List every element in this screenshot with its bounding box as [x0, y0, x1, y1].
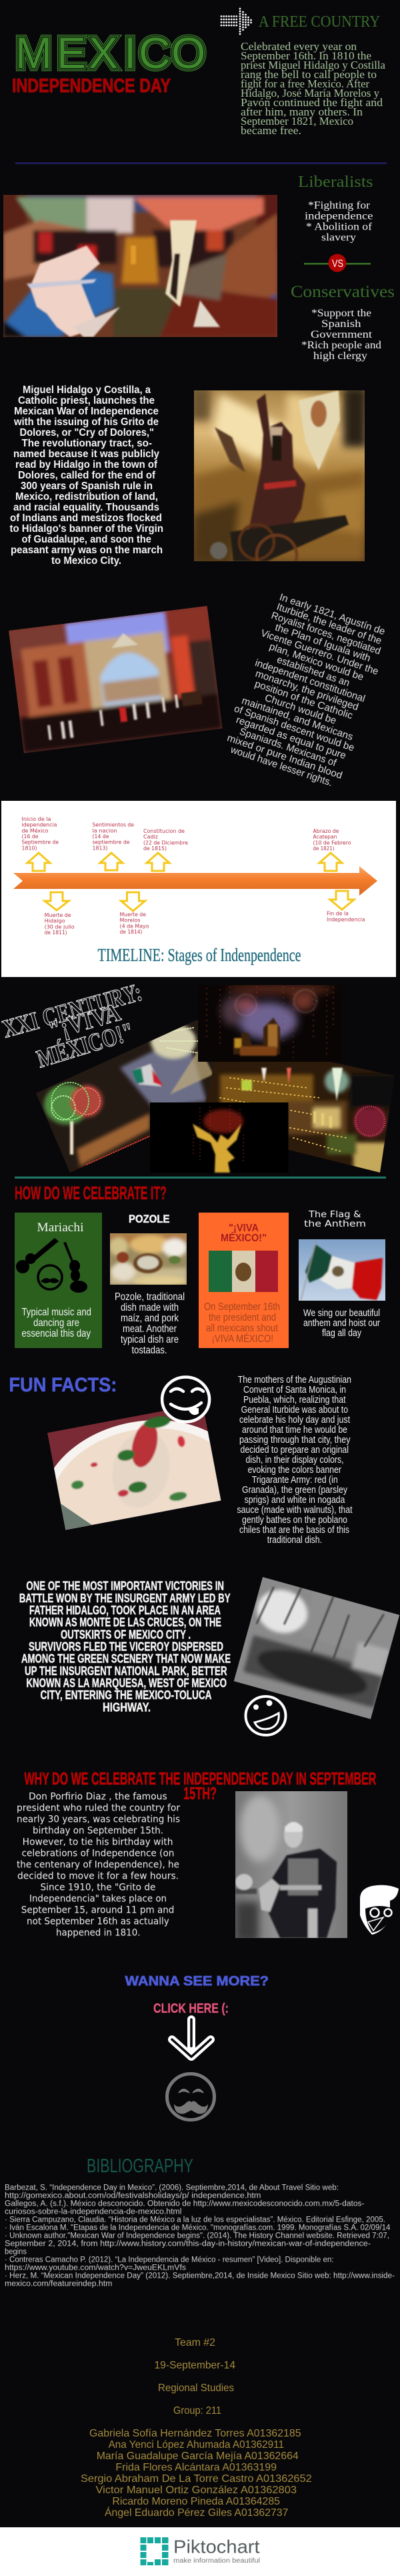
- panel: Mariachi: [15, 1213, 102, 1348]
- text block: team credits: Group: 211: [173, 2405, 221, 2417]
- text block: chiles en nogada story: dish, in their display colors,: [245, 1454, 344, 1466]
- text block: introduction: fight for a free Mexico. After: [241, 77, 370, 90]
- icon: laughing smiley: [245, 1696, 285, 1735]
- text block: team credits: Ricardo Moreno Pineda A01364285: [112, 2496, 280, 2507]
- timeline labels above: Cadiz: [143, 834, 158, 840]
- image: fireworks aerial city (right): [205, 1062, 395, 1173]
- text block: introduction: priest Miguel Hidalgo y Costilla: [241, 59, 386, 71]
- text block: Miguel Hidalgo: with the issuing of his Grito de: [13, 416, 159, 428]
- text block: Miguel Hidalgo: peasant army was on the march: [11, 545, 163, 556]
- text block: team credits: María Guadalupe García Mejía A01362664: [97, 2451, 299, 2462]
- text block: Monte de las Cruces: FATHER HIDALGO, TOOK PLACE IN AN AREA: [29, 1603, 221, 1617]
- heading: XXI Century Viva Mexico: "¡VIVA: [45, 998, 124, 1045]
- text block: Plan of Iguala (rotated): independent constitutional: [253, 657, 367, 705]
- text block: Plan of Iguala (rotated): mixed or pure Indian blood: [226, 732, 344, 781]
- liberalist points: * Abolition of: [306, 222, 373, 232]
- icon: man with glasses: [360, 1885, 399, 1935]
- Viva Mexico caption: the president and: [209, 1312, 276, 1323]
- Piktochart wordmark: Piktochart: [173, 2537, 260, 2557]
- text block: chiles en nogada story: Granada), the green (parsley: [242, 1484, 347, 1496]
- text block: introduction: Hidalgo, José María Morelos y: [241, 87, 380, 99]
- timeline labels above: (16 de: [21, 834, 39, 840]
- VS badge: VS: [332, 258, 343, 270]
- text block: Monte de las Cruces: KNOWN AS MONTE DE LAS CRUCES, ON THE: [29, 1615, 221, 1629]
- text block: chiles en nogada story: sauce (made with walnuts), that: [237, 1504, 353, 1516]
- flag title: [304, 1210, 366, 1229]
- timeline labels above: (22 de Diciembre: [143, 840, 188, 846]
- icon: tongue smiley: [162, 1377, 209, 1421]
- text block: Miguel Hidalgo: named because it was publicly: [13, 448, 159, 460]
- flag caption: flag all day: [322, 1327, 361, 1339]
- image: independence mural: [0, 190, 283, 337]
- text block: chiles en nogada story: Trigarante Army: red (in: [252, 1474, 338, 1486]
- text block: bibliography: begins: [5, 2248, 27, 2256]
- text block: Porfirio Diaz: September 15, around 11 pm and: [21, 1905, 174, 1916]
- text block: Porfirio Diaz: However, to tie his birthday with: [23, 1837, 173, 1848]
- image: fireworks over cathedral: [198, 982, 342, 1062]
- text block: Miguel Hidalgo: Miguel Hidalgo y Costilla, a: [23, 384, 151, 396]
- text block: bibliography: curiosos-sobre-la-independencia-de-mexico.html: [5, 2208, 181, 2216]
- text block: Monte de las Cruces: [19, 1579, 231, 1714]
- text block: chiles en nogada story: chiles that are the basis of this: [239, 1524, 349, 1536]
- text block: bibliography: mexico.com/featureindep.htm: [5, 2280, 112, 2288]
- text block: Plan of Iguala (rotated): would have lesser rights.: [229, 744, 334, 789]
- timeline title: TIMELINE: Stages of Indenpendence: [97, 945, 301, 965]
- Pozole caption: maíz, and pork: [121, 1313, 179, 1324]
- text block: Plan of Iguala (rotated): monarchy, the privileged: [254, 668, 360, 713]
- text block: Porfirio Diaz: [17, 1792, 181, 1939]
- panel: The Flag and the Anthem: [299, 1210, 385, 1339]
- text block: introduction: after him, many others. In: [241, 105, 363, 118]
- image: Porfirio Diaz portrait: [235, 1791, 347, 1942]
- title: Mexico Independence Day: MEXICO: [15, 28, 205, 77]
- heading: Liberalists: Liberalists: [298, 174, 373, 191]
- text block: introduction: [241, 40, 386, 137]
- text block: team credits: Regional Studies: [158, 2382, 234, 2394]
- timeline down arrows: [45, 891, 354, 911]
- heading: Bibliography: BIBLIOGRAPHY: [87, 2156, 193, 2177]
- timeline labels above: (10 de Febrero: [313, 840, 351, 846]
- text block: Plan of Iguala (rotated): plan, Mexico would be: [268, 641, 365, 683]
- image: triumphal arch parade painting: [9, 606, 223, 753]
- text block: team credits: Victor Manuel Ortiz González A01362803: [96, 2485, 297, 2496]
- text block: bibliography: · Iván Escalona M. "Etapas de la Independencia de México. "monografías.com. 1999. Monografías S.A. 02/09/14: [5, 2224, 391, 2232]
- text block: introduction: Pavón continued the fight and: [241, 96, 383, 109]
- text block: Porfirio Diaz: Independencia" takes place on: [29, 1894, 167, 1905]
- flag title: The Flag &: [308, 1210, 361, 1220]
- text block: Monte de las Cruces: AMONG THE GREEN SCENERY THAT NOW MAKE: [21, 1652, 231, 1666]
- image: battle engraving: [234, 1577, 399, 1719]
- conservative points: Government: [311, 329, 373, 340]
- timeline labels above: 1813): [92, 845, 108, 851]
- timeline labels below: (30 de julio: [45, 924, 75, 930]
- heading: How do we celebrate it: HOW DO WE CELEBRATE IT?: [15, 1183, 167, 1203]
- text block: Porfirio Diaz: celebrations of Independence (on: [21, 1849, 174, 1859]
- timeline up arrows: [27, 853, 342, 871]
- timeline labels above: 1810): [21, 845, 37, 851]
- text block: bibliography: · Contreras Camacho P. (2012). “La Independencia de México - resumen” [Video]. Disponible en:: [5, 2256, 333, 2264]
- text block: Plan of Iguala (rotated): position of the Catholic: [253, 678, 355, 721]
- text block: chiles en nogada story: passing through that city, they: [239, 1434, 351, 1445]
- text block: Miguel Hidalgo: Mexican War of Independence: [14, 406, 159, 417]
- timeline labels above: la nacion: [92, 828, 117, 834]
- heading: XXI Century Viva Mexico: MÉXICO!": [33, 1018, 137, 1074]
- text block: Monte de las Cruces: KNOWN AS LA MARQUESA, WEST OF MEXICO: [26, 1676, 227, 1690]
- timeline labels below: de 1811): [45, 930, 67, 936]
- text block: introduction: became free.: [241, 124, 301, 137]
- timeline labels below: Fin de la: [327, 911, 349, 917]
- text block: Monte de las Cruces: UP THE INSURGENT NATIONAL PARK, BETTER: [25, 1664, 227, 1678]
- text block: Monte de las Cruces: CITY, ENTERING THE MEXICO-TOLUCA: [40, 1688, 212, 1702]
- conservative points: *Rich people and: [301, 340, 381, 351]
- text block: Plan of Iguala (rotated): In early 1821, Agustín de: [278, 591, 387, 637]
- text block: Miguel Hidalgo: Catholic priest, launches the: [18, 395, 155, 406]
- text block: bibliography: http://gomexico.about.com/od/festivalsholidays/p/ independence.htm: [5, 2192, 261, 2200]
- text block: Porfirio Diaz: the centenary of Independence), he: [17, 1860, 179, 1871]
- Pozole caption: dish made with: [121, 1302, 179, 1313]
- timeline labels above: Sentimientos de: [92, 822, 134, 828]
- timeline labels above: [21, 816, 351, 852]
- text block: Miguel Hidalgo: The revolutionary tract, so-: [21, 438, 152, 449]
- text block: Plan of Iguala (rotated): [220, 589, 394, 791]
- text block: Porfirio Diaz: happened in 1810.: [56, 1928, 140, 1939]
- timeline labels below: (4 de Mayo: [120, 923, 149, 929]
- text block: Miguel Hidalgo: read by Hidalgo in the town of: [15, 459, 158, 470]
- text block: chiles en nogada story: General Iturbide was about to: [241, 1404, 348, 1415]
- text block: bibliography: September 2, 2014, from http://www.history.com/this-day-in-history/mexican-war-of-independence-: [5, 2240, 371, 2248]
- Pozole caption: tostadas.: [132, 1345, 167, 1356]
- timeline labels above: Constitucion de: [143, 828, 185, 834]
- Viva Mexico caption: [204, 1301, 280, 1345]
- Pozole caption: typical dish are: [121, 1334, 179, 1345]
- Viva Mexico title: MÉXICO!": [221, 1231, 267, 1244]
- text block: chiles en nogada story: Convent of Santa Monica, in: [243, 1384, 346, 1395]
- text block: Porfirio Diaz: president who ruled the country for: [17, 1803, 181, 1814]
- timeline labels above: de 1815): [143, 846, 167, 852]
- image: fireworks over palace (left): [36, 1020, 215, 1173]
- timeline labels above: septiembre de: [92, 840, 130, 846]
- flag caption: anthem and hoist our: [303, 1317, 380, 1329]
- panel: Viva Mexico: [199, 1213, 289, 1348]
- liberalist points: independence: [305, 211, 373, 222]
- text block: chiles en nogada story: celebrate his holy day and just: [239, 1414, 351, 1425]
- text block: Monte de las Cruces: SURVIVORS FLED THE VICEROY DISPERSED: [29, 1639, 223, 1654]
- text block: Plan of Iguala (rotated): Iturbide, the leader of the: [275, 601, 383, 647]
- heading: XXI Century Viva Mexico: XXI CENTURY:: [0, 978, 145, 1044]
- Viva Mexico title: "¡VIVA: [229, 1223, 259, 1234]
- text block: Plan of Iguala (rotated): regarded as equal to pure: [235, 714, 347, 761]
- text block: Plan of Iguala (rotated): the Plan of Iguala with: [273, 622, 372, 664]
- text block: chiles en nogada story: sprigs) and white in nogada: [245, 1494, 345, 1506]
- call to action: Click here: CLICK HERE (:: [153, 2001, 229, 2016]
- heading: Why do we celebrate in September 15th: 15TH?: [183, 1783, 217, 1803]
- text block: introduction: September 16th. In 1810 the: [241, 49, 371, 62]
- heading: Why do we celebrate in September 15th: [24, 1768, 377, 1803]
- text block: Porfirio Diaz: decided to move it for a few hours.: [17, 1871, 179, 1882]
- text block: Miguel Hidalgo: Mexico, redistribution of land,: [15, 491, 158, 503]
- text block: team credits: Ana Yenci López Ahumada A01362911: [109, 2439, 284, 2451]
- text block: Miguel Hidalgo: to Hidalgo's banner of the Virgin: [9, 523, 163, 535]
- timeline labels above: idependencia: [21, 822, 57, 828]
- icon: Piktochart mark: [140, 2537, 168, 2565]
- text block: Plan of Iguala (rotated): Church would be: [263, 692, 338, 727]
- flag caption: [303, 1307, 380, 1339]
- text block: team credits: Gabriela Sofía Hernández Torres A01362185: [89, 2428, 301, 2439]
- text block: Plan of Iguala (rotated): maintained, and Mexicans: [240, 695, 355, 743]
- text block: chiles en nogada story: decided to prepare an original: [240, 1444, 349, 1456]
- text block: introduction: Celebrated every year on: [241, 40, 357, 53]
- timeline labels below: de 1814): [120, 929, 143, 935]
- Viva Mexico caption: ¡VIVA MÉXICO!: [212, 1332, 273, 1345]
- text block: Monte de las Cruces: OUTSKIRTS OF MEXICO CITY .: [61, 1627, 191, 1641]
- icon: dotted arrow: [221, 9, 251, 35]
- Mariachi caption: [21, 1307, 91, 1339]
- text block: Plan of Iguala (rotated): established as an: [275, 654, 351, 689]
- text block: bibliography: [5, 2184, 395, 2288]
- text block: Miguel Hidalgo: Dolores, called for the end of: [18, 470, 156, 481]
- text block: Plan of Iguala (rotated): Spaniards. Mexicans of: [238, 726, 338, 769]
- timeline labels below: Morelos: [120, 918, 141, 924]
- conservative points: Spanish: [321, 318, 361, 330]
- liberalist points: *Fighting for: [308, 200, 371, 211]
- title: Mexico Independence Day: MEXICO: [15, 28, 205, 77]
- panel: Liberalists vs Conservatives: [291, 174, 395, 362]
- text block: team credits: Sergio Abraham De La Torre Castro A01362652: [81, 2473, 312, 2485]
- text block: Porfirio Diaz: nearly 30 years, was celebrating his: [17, 1815, 180, 1825]
- image: Angel of Independence fireworks: [150, 1102, 288, 1173]
- Mariachi caption: dancing are: [33, 1317, 79, 1329]
- text block: Porfirio Diaz: Don Porfirio Diaz , the famous: [29, 1792, 167, 1803]
- timeline main arrow: [13, 866, 377, 896]
- text block: Porfirio Diaz: birthday on September 15th.: [33, 1826, 163, 1837]
- text block: team credits: Ángel Eduardo Pérez Giles A01362737: [105, 2506, 289, 2519]
- timeline labels below: Muerte de: [120, 912, 146, 918]
- Pozole title: POZOLE: [129, 1213, 169, 1225]
- panel: Pozole: [109, 1213, 187, 1356]
- Viva Mexico caption: all mexicans shout: [206, 1323, 278, 1334]
- image: grunge flag: [209, 1251, 278, 1292]
- text block: Monte de las Cruces: ONE OF THE MOST IMPORTANT VICTORIES IN: [26, 1579, 224, 1593]
- text block: Monte de las Cruces: HIGHWAY.: [103, 1700, 151, 1714]
- text block: chiles en nogada story: gently bathes on the poblano: [242, 1514, 347, 1526]
- timeline labels above: Acatepan: [313, 834, 337, 840]
- icon: guitar, moustache face, violin: [16, 1238, 87, 1293]
- conservative points: high clergy: [313, 350, 367, 362]
- text block: chiles en nogada story: [237, 1374, 353, 1546]
- Viva Mexico caption: On September 16th: [204, 1301, 280, 1313]
- heading: XXI Century Viva Mexico: [0, 978, 145, 1074]
- text block: Miguel Hidalgo: of Guadalupe, and soon the: [21, 534, 151, 545]
- Viva Mexico title: [221, 1223, 267, 1244]
- subtitle: INDEPENDENCE DAY: [12, 75, 171, 97]
- image: pozole dish: [109, 1233, 187, 1287]
- liberalist points: slavery: [321, 232, 356, 243]
- timeline labels above: Inicio de la: [21, 816, 51, 822]
- heading: Conservatives: Conservatives: [291, 283, 395, 301]
- title: Mexico Independence Day: MEXICO: [15, 28, 205, 77]
- text block: Porfirio Diaz: not September 16th as actually: [27, 1917, 169, 1927]
- flag caption: We sing our beautiful: [303, 1307, 380, 1319]
- text block: chiles en nogada story: around that time he would be: [242, 1424, 347, 1435]
- text block: Plan of Iguala (rotated): of Spanish descent would be: [233, 703, 356, 753]
- Piktochart tagline: make information beautiful: [173, 2557, 260, 2565]
- Pozole caption: meat. Another: [123, 1323, 177, 1335]
- text block: team credits: [81, 2337, 312, 2519]
- text block: bibliography: https://www.youtube.com/watch?v=JweuEKLmVfs: [5, 2264, 186, 2272]
- footer: Piktochart logo: [0, 2527, 400, 2576]
- icon: moustache smiley: [167, 2074, 215, 2120]
- timeline labels above: (14 de: [92, 834, 109, 840]
- conservative points: *Support the: [311, 308, 371, 319]
- timeline labels above: Septiembre de: [21, 840, 59, 846]
- image: waving flag: [299, 1239, 385, 1301]
- image: chiles en nogada: [47, 1411, 221, 1530]
- text block: team credits: Frida Flores Alcántara A01363199: [115, 2462, 277, 2473]
- timeline labels below: Muerte de: [45, 912, 71, 918]
- text block: Miguel Hidalgo: Dolores, or "Cry of Dolores,": [20, 427, 154, 438]
- text block: bibliography: Barbezat, S. “Independence Day in Mexico”. (2006). Septiembre,2014, de About Travel Sitio web:: [5, 2184, 339, 2192]
- text block: Miguel Hidalgo: of Indians and mestizos flocked: [10, 513, 162, 524]
- Pozole caption: [115, 1291, 185, 1356]
- text block: Miguel Hidalgo: to Mexico City.: [51, 555, 121, 567]
- text block: Plan of Iguala (rotated): Royalist forces, negotiated: [270, 610, 382, 657]
- title: Mexico Independence Day: MEXICO: [15, 28, 205, 77]
- text block: Miguel Hidalgo: [9, 384, 163, 567]
- text block: chiles en nogada story: evoking the colors banner: [248, 1464, 341, 1476]
- panel: timeline: [1, 801, 396, 977]
- text block: chiles en nogada story: traditional dish.: [267, 1534, 322, 1546]
- arrow: pointing down: [172, 2019, 211, 2057]
- text block: introduction: rang the bell to call people to: [241, 68, 377, 81]
- timeline labels above: de México: [21, 828, 49, 834]
- timeline labels above: de 1821): [313, 846, 335, 852]
- text block: introduction: September 1821, Mexico: [241, 115, 353, 127]
- text block: Miguel Hidalgo: 300 years of Spanish rule in: [21, 480, 153, 492]
- Pozole caption: Pozole, traditional: [115, 1291, 185, 1303]
- Mariachi caption: Typical music and: [21, 1307, 91, 1318]
- text block: Plan of Iguala (rotated): Vicente Guerrero. Under the: [259, 627, 380, 677]
- timeline labels above: Abrazo de: [313, 828, 339, 834]
- text block: bibliography: · Herz, M. “Mexican Independence Day” (2012). Septiembre,2014, de Inside Mexico Sitio web: http://www.inside-: [5, 2272, 395, 2280]
- text block: bibliography: · Unknown author."Mexican War of Independence begins". (2014). The History Channel website. Retrieved 7:07,: [5, 2232, 389, 2240]
- Mariachi title: Mariachi: [37, 1221, 83, 1235]
- heading: Fun Facts: FUN FACTS:: [9, 1374, 117, 1396]
- call to action: Wanna see more: WANNA SEE MORE?: [125, 1974, 269, 1989]
- flag title: the Anthem: [304, 1219, 366, 1229]
- timeline labels below: [45, 911, 365, 936]
- title: Mexico Independence Day: MEXICO: [15, 28, 205, 77]
- liberalist points: [305, 200, 373, 243]
- text block: Porfirio Diaz: Since 1910, the "Grito de: [40, 1883, 155, 1893]
- text block: chiles en nogada story: Puebla, which, realizing that: [243, 1394, 346, 1405]
- timeline labels below: Hidalgo: [45, 918, 65, 924]
- text block: chiles en nogada story: The mothers of the Augustinian: [238, 1374, 351, 1385]
- text block: team credits: Team #2: [175, 2337, 215, 2348]
- VS badge: [304, 254, 371, 272]
- heading: A Free Country: A FREE COUNTRY: [259, 13, 380, 31]
- text block: Monte de las Cruces: BATTLE WON BY THE INSURGENT ARMY LED BY: [19, 1591, 231, 1605]
- image: Hidalgo with cannon: [194, 390, 365, 561]
- text block: bibliography: Gallegos, A. (s.f.). México desconocido. Obtenido de http://www.mexicodesconocido.com.mx/5-datos-: [5, 2200, 365, 2208]
- conservative points: [301, 308, 381, 362]
- timeline labels below: Independencia: [327, 916, 365, 922]
- Mariachi caption: essencial this day: [21, 1328, 91, 1339]
- text block: bibliography: · Sierra Campuzano, Claudia. “Historia de México a la luz de los especialistas”. México. Editorial Esfinge, 2005.: [5, 2216, 385, 2224]
- text block: Miguel Hidalgo: and racial equality. Thousands: [13, 502, 159, 513]
- text block: team credits: 19-September-14: [155, 2360, 235, 2371]
